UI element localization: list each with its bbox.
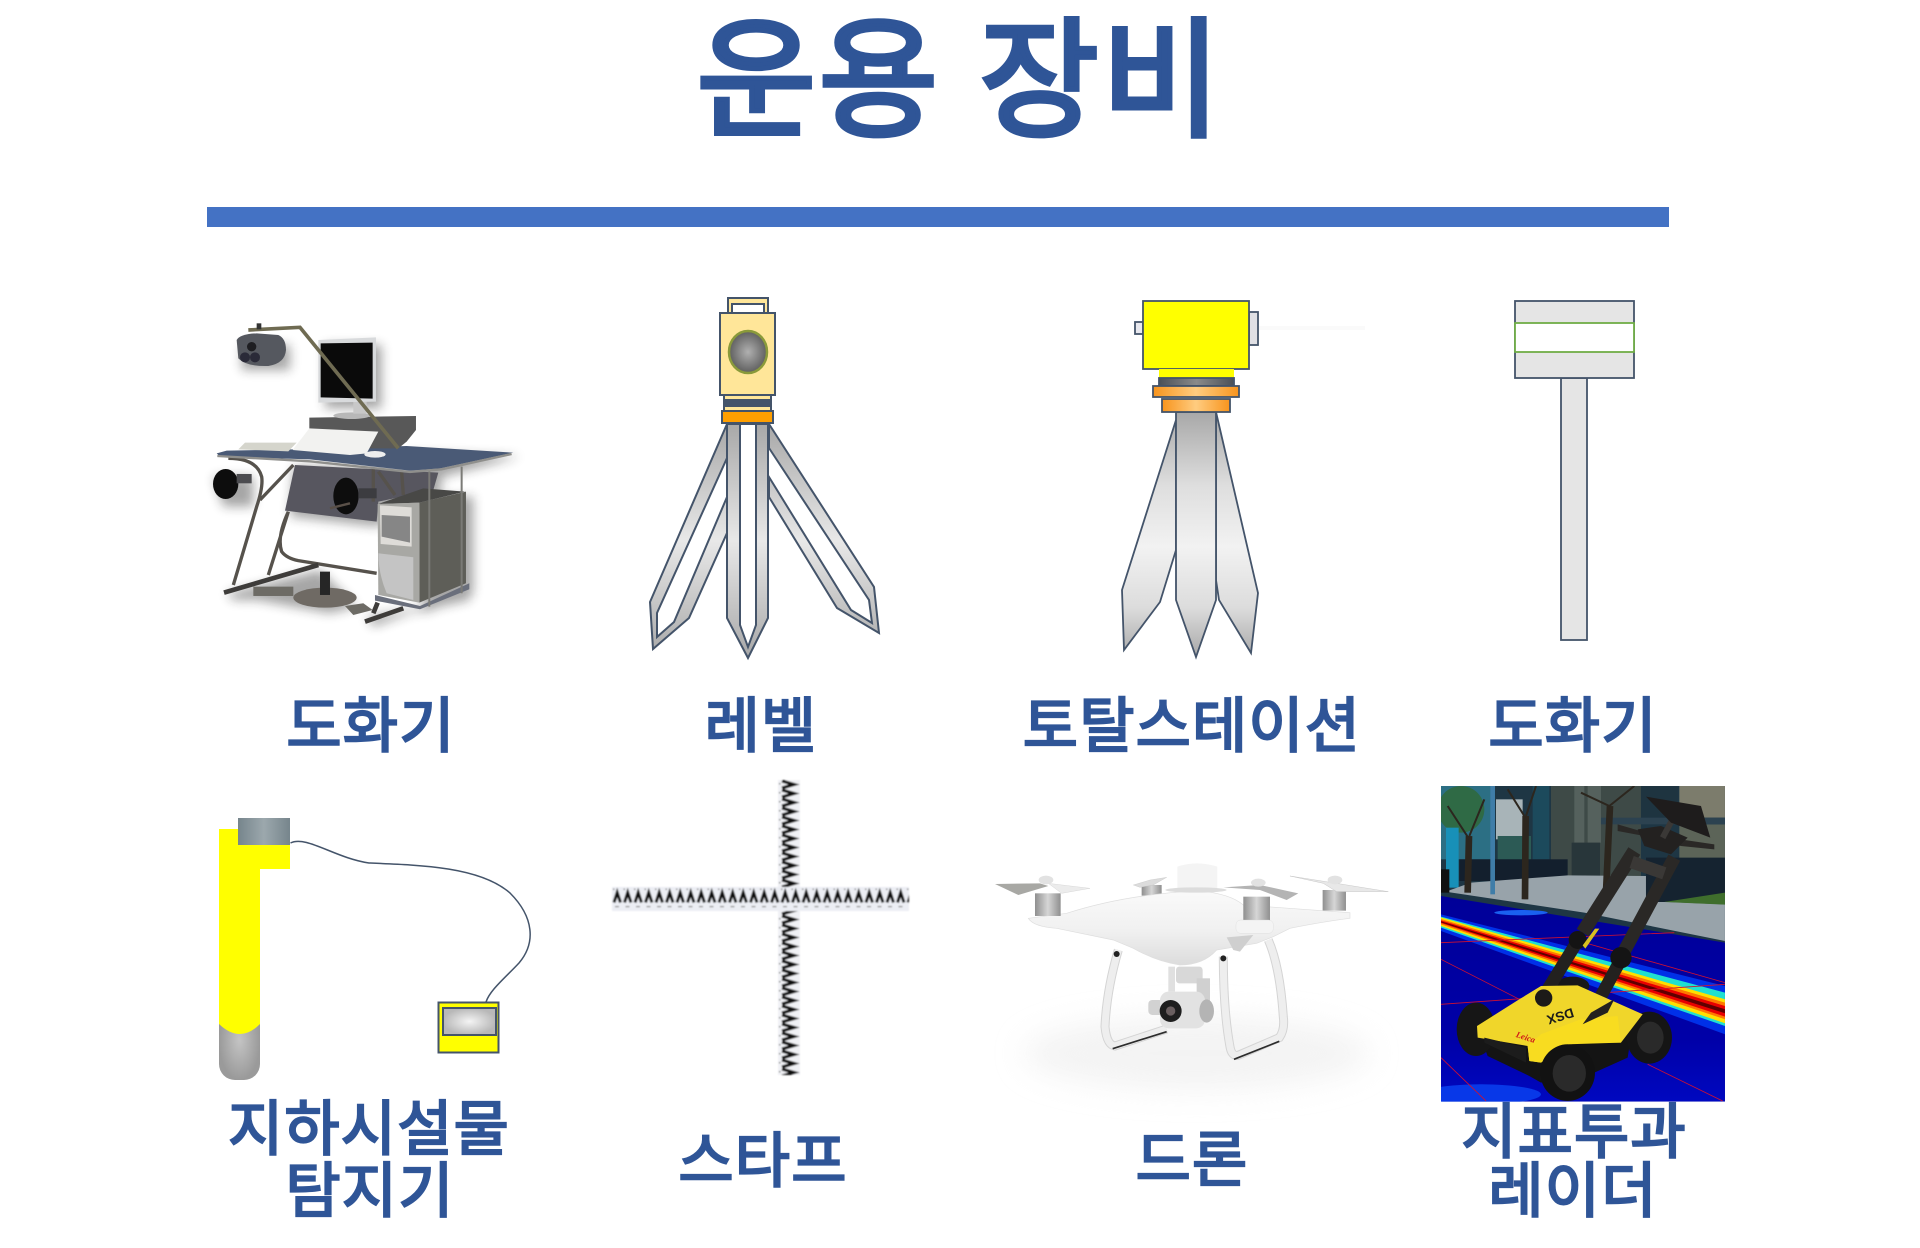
icon: underground utility detector [219, 818, 530, 1080]
label: plotter: 도화기 [286, 693, 456, 760]
label: plotter second: 도화기 [1488, 693, 1658, 760]
icon: ground penetrating radar photo: DSX [1545, 1005, 1576, 1027]
title divider bar [207, 207, 1669, 227]
icon: cross of survey staffs [612, 780, 909, 1075]
label: level: 레벨 [705, 693, 817, 760]
label: drone: 드론 [1136, 1127, 1248, 1194]
icon: drone [995, 863, 1388, 1090]
label: ground penetrating radar: 레이더 [1488, 1158, 1658, 1225]
label: total station: 토탈스테이션 [1023, 693, 1361, 760]
label: ground penetrating radar: 지표투과 [1461, 1099, 1687, 1166]
label: underground detector: 지하시설물 [228, 1096, 510, 1163]
label: underground detector: 탐지기 [285, 1158, 455, 1225]
icon: ground penetrating radar photo [1421, 786, 1725, 1104]
title: 운용 장비 [696, 8, 1224, 154]
icon: total station on tripod [1122, 301, 1365, 657]
icon: plotter workstation [213, 323, 520, 627]
icon: rod with target plate [1515, 301, 1634, 640]
icon: level on tripod [650, 298, 879, 658]
icon: ground penetrating radar photo: Leica [1514, 1029, 1537, 1045]
label: staff: 스타프 [678, 1128, 848, 1195]
